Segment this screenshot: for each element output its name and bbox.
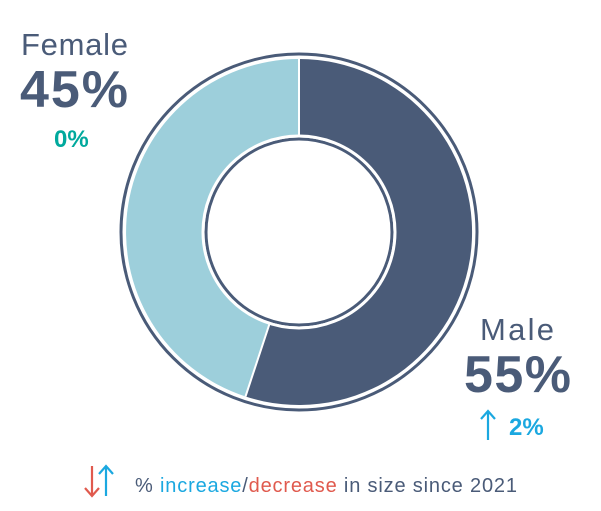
icon: up arrow bbox=[481, 411, 495, 440]
label: female bbox=[20, 27, 128, 153]
label: male: Male bbox=[480, 312, 554, 347]
legend bbox=[85, 466, 517, 497]
icon: down/up arrows bbox=[85, 466, 113, 496]
label: female: 0% bbox=[54, 126, 89, 153]
label: male bbox=[464, 312, 571, 441]
segment: female bbox=[126, 59, 299, 396]
donut chart bbox=[121, 54, 477, 410]
label: male: 55% bbox=[464, 346, 571, 404]
label: male: 2% bbox=[509, 414, 544, 441]
inner ring bbox=[206, 139, 392, 325]
segment: male bbox=[246, 59, 472, 405]
outer ring bbox=[121, 54, 477, 410]
label: female: Female bbox=[21, 27, 128, 62]
label: female: 45% bbox=[20, 61, 128, 119]
legend: % increase/decrease in size since 2021 bbox=[135, 475, 517, 497]
